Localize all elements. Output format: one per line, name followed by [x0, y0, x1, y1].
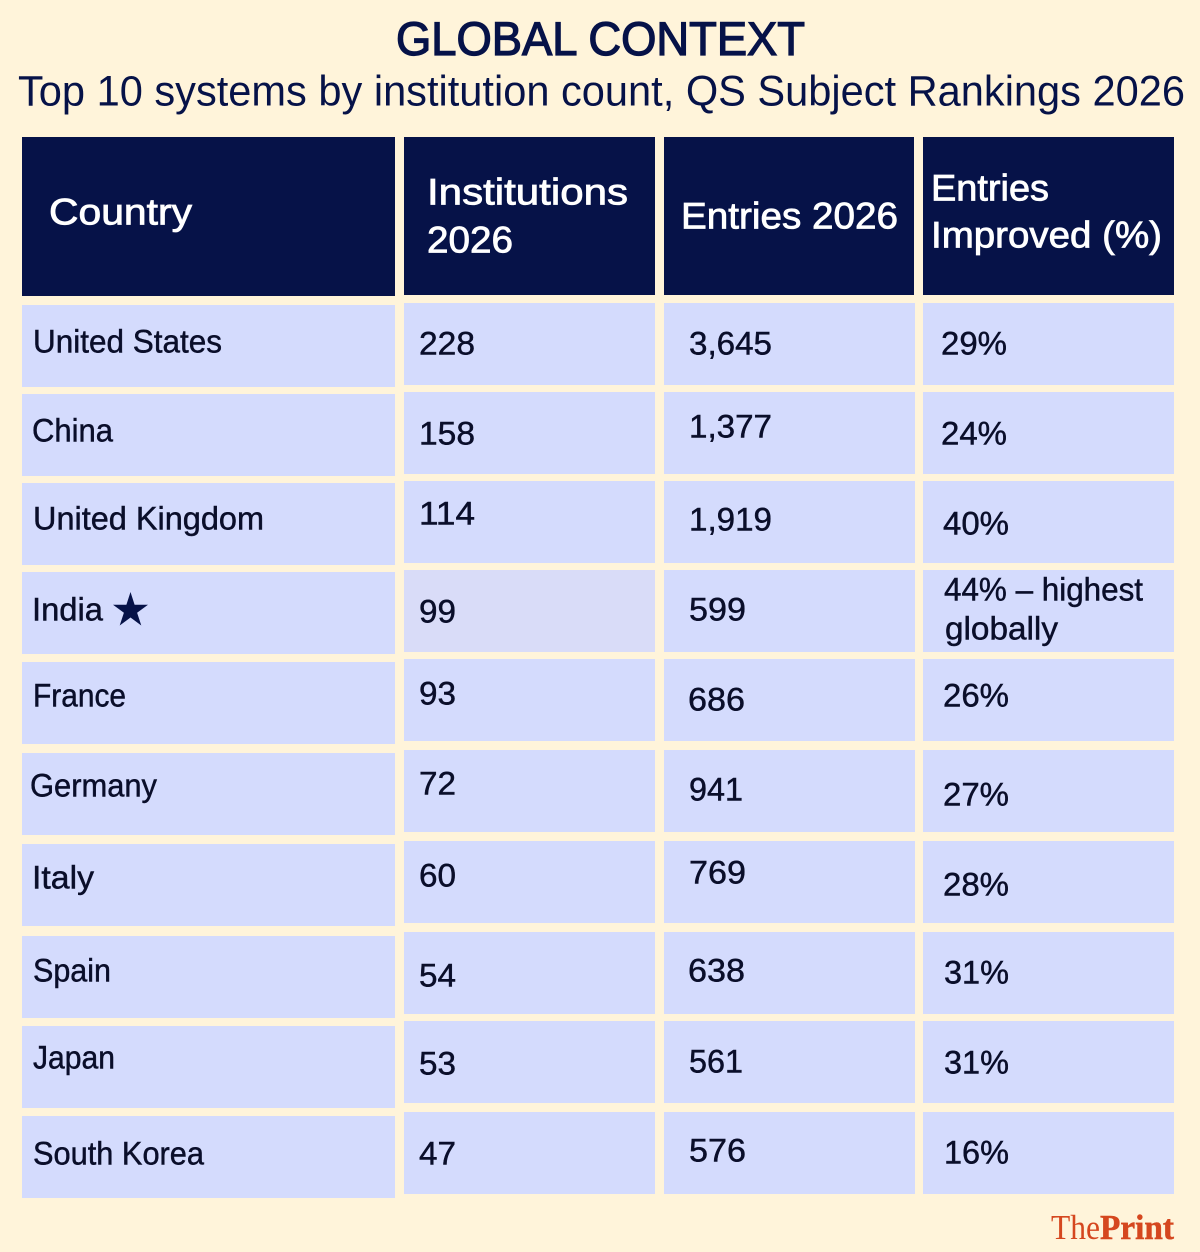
header: Country: [22, 137, 395, 296]
row: United States: [22, 303, 1174, 387]
row: United Kingdom: [22, 481, 1174, 565]
row: United States: 3,645: [689, 326, 772, 362]
row: South Korea: South Korea: [33, 1136, 204, 1172]
row: Germany: 941: [689, 772, 743, 808]
row: China: 24%: [941, 416, 1007, 452]
row: South Korea: 47: [419, 1136, 456, 1172]
title: GLOBAL CONTEXT: [396, 12, 805, 65]
row: China: 158: [419, 416, 475, 452]
row: Japan: 31%: [944, 1044, 1009, 1080]
row: India: 44% – highest: [944, 572, 1143, 608]
logo: ThePrint: Print: [1100, 1208, 1174, 1247]
row: France: 686: [688, 682, 745, 718]
header: Institutions 2026: [404, 137, 655, 295]
row: China: China: [32, 412, 113, 448]
row: France: France: [33, 678, 126, 714]
row: France: [22, 659, 1174, 744]
header: Entries Improved: Improved (%): [931, 214, 1162, 256]
subtitle: Top 10 systems by institution count, QS Subject Rankings 2026: [18, 68, 1185, 116]
row: United Kingdom: 40%: [943, 506, 1009, 542]
row: Spain: 54: [419, 958, 456, 994]
header: Entries 2026: Entries 2026: [681, 196, 898, 236]
header: Institutions 2026: Institutions: [427, 172, 628, 212]
row: Germany: 27%: [943, 776, 1009, 812]
row: Japan: Japan: [33, 1040, 115, 1076]
row: India: [22, 570, 1174, 654]
row: Spain: [22, 932, 1174, 1018]
header: Entries 2026: [664, 137, 914, 295]
row: Italy: 769: [689, 854, 746, 890]
table header row: [22, 137, 1174, 296]
row: India: India: [32, 592, 103, 628]
logo: ThePrint: The: [1051, 1208, 1100, 1247]
row: Japan: 561: [689, 1044, 743, 1080]
row: Spain: 31%: [944, 954, 1009, 990]
row: Spain: Spain: [33, 952, 111, 988]
row: India: 99: [419, 594, 456, 630]
row: India: 599: [689, 592, 746, 628]
row: United Kingdom: 114: [419, 496, 475, 532]
row: China: 1,377: [689, 408, 772, 444]
row: United States: 228: [419, 326, 475, 362]
row: Germany: 72: [419, 766, 456, 802]
row: South Korea: 576: [689, 1132, 746, 1168]
icon: star: [113, 592, 148, 626]
row: South Korea: 16%: [944, 1134, 1009, 1170]
row: Spain: 638: [688, 952, 745, 988]
header: Institutions 2026: 2026: [427, 220, 513, 260]
row: Italy: [22, 841, 1174, 926]
row: Germany: Germany: [30, 768, 157, 804]
row: Italy: Italy: [32, 860, 94, 896]
row: China: [22, 392, 1174, 476]
header: Entries Improved: Entries: [931, 168, 1049, 208]
row: South Korea: [22, 1112, 1174, 1198]
logo: ThePrint: [1051, 1208, 1174, 1247]
row: Italy: 28%: [943, 866, 1009, 902]
row: United States: United States: [33, 324, 222, 360]
row: Japan: 53: [419, 1046, 456, 1082]
row: India: globally: [945, 610, 1058, 646]
row: France: 26%: [943, 678, 1009, 714]
row: Japan: [22, 1021, 1174, 1108]
header: Entries Improved: [923, 137, 1174, 295]
row: United States: 29%: [941, 326, 1007, 362]
row: Italy: 60: [419, 858, 456, 894]
row: United Kingdom: United Kingdom: [33, 500, 264, 536]
row: Germany: [22, 750, 1174, 835]
header: Country: Country: [49, 192, 193, 232]
row: France: 93: [419, 676, 456, 712]
row: United Kingdom: 1,919: [689, 502, 772, 538]
